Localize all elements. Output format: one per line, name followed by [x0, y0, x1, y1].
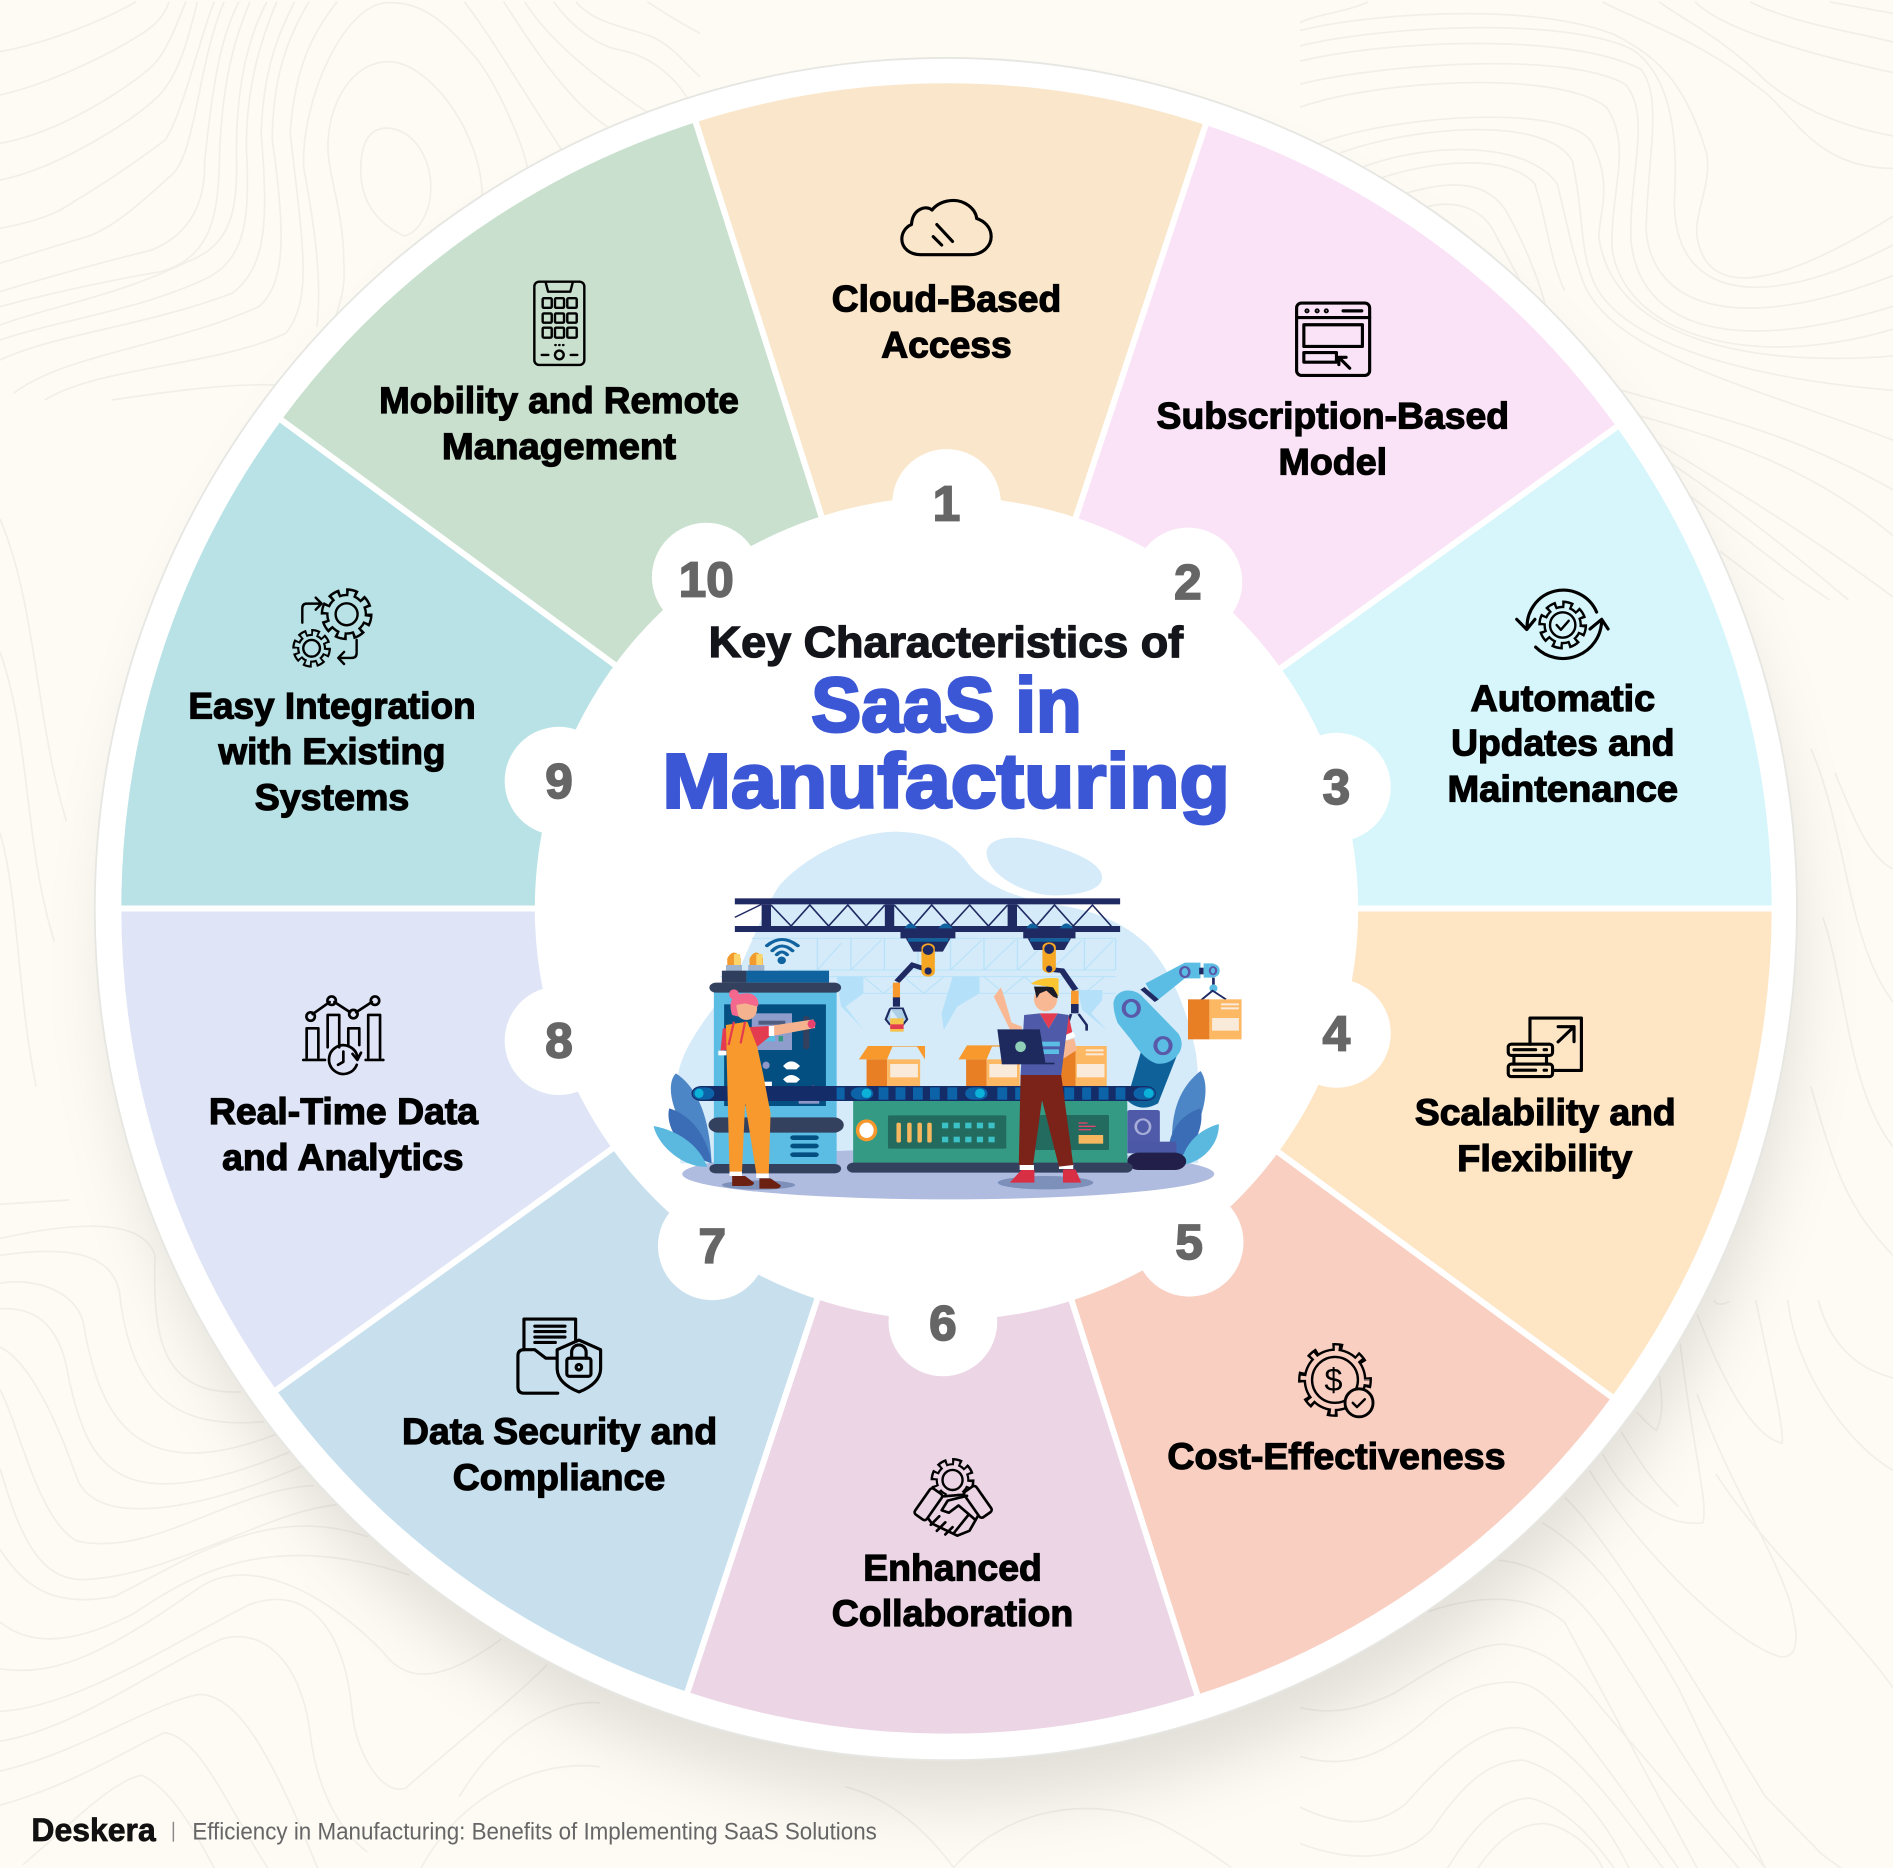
footer brand: Deskera: [31, 1811, 157, 1848]
label: Mobility and Remote Management: [379, 379, 739, 467]
number badge 6: [889, 1268, 997, 1376]
icon: mobile phone: [534, 282, 584, 365]
faded background truss: [721, 938, 1116, 993]
panel: Scalability and Flexibility: [946, 908, 1775, 1399]
label: Easy Integration with Existing Systems: [188, 684, 476, 818]
label: Easy Integration with Existing Systems: Easy Integration: [188, 684, 476, 726]
worker: woman: [718, 989, 816, 1190]
panel: Data Security and Compliance: [274, 908, 946, 1695]
icon: handshake and gear: [913, 1461, 993, 1536]
label: Easy Integration with Existing Systems: Systems: [255, 776, 409, 818]
label: Data Security and Compliance: Compliance: [453, 1456, 665, 1498]
label: Data Security and Compliance: Data Security and: [402, 1410, 717, 1452]
number badge 2: [1134, 528, 1242, 636]
label: Enhanced Collaboration: Collaboration: [832, 1592, 1073, 1634]
label: Real-Time Data and Analytics: [209, 1090, 479, 1178]
label: Scalability and Flexibility: [1415, 1091, 1676, 1179]
center hub: [535, 497, 1358, 1320]
label: Real-Time Data and Analytics: Real-Time Data: [209, 1090, 479, 1132]
label: Automatic Updates and Maintenance: [1448, 677, 1678, 810]
icon: scaling servers: [1508, 1018, 1581, 1077]
number badge 10: [652, 523, 761, 631]
number badge 5: 5: [1175, 1215, 1203, 1270]
panel: Cloud-Based Access: [695, 80, 1207, 908]
icon: two gears with arrows: [295, 591, 370, 665]
number badge 2: 2: [1174, 555, 1202, 610]
number badge 6: 6: [929, 1296, 957, 1351]
boxes on conveyor: [859, 1045, 1107, 1086]
label: Cloud-Based Access: [832, 277, 1061, 365]
number badge 7: 7: [699, 1219, 726, 1274]
number badge 7: [658, 1192, 767, 1300]
number badge 5: [1135, 1188, 1243, 1297]
label: Scalability and Flexibility: Scalability and: [1415, 1091, 1676, 1133]
wifi icon: [767, 940, 798, 963]
robot arm base and arm: [1113, 963, 1242, 1170]
label: Easy Integration with Existing Systems: with Existing: [218, 730, 445, 772]
icon: secured folder: [518, 1319, 601, 1393]
panel: Enhanced Collaboration: [686, 908, 1198, 1737]
label: Automatic Updates and Maintenance: Maintenance: [1448, 768, 1678, 810]
footer caption: Efficiency in Manufacturing: Benefits of Implementing SaaS Solutions: [192, 1818, 877, 1845]
panel: Easy Integration with Existing Systems: [118, 418, 946, 908]
panel: Subscription-Based Model: [946, 122, 1619, 908]
hanging arm 2: [1023, 923, 1087, 1031]
ground: [682, 1149, 1214, 1199]
icon: dollar gear: [1301, 1346, 1373, 1417]
number badge 8: 8: [545, 1014, 573, 1069]
number badge 3: [1282, 733, 1391, 841]
illustration: factory scene: [654, 832, 1242, 1199]
label: Scalability and Flexibility: Flexibility: [1457, 1137, 1632, 1179]
icon: browser window: [1297, 303, 1370, 375]
number badge 1: [892, 449, 1001, 558]
label: Subscription-Based Model: Subscription-Based: [1157, 395, 1509, 437]
title: Manufacturing: [662, 739, 1230, 825]
label: Subscription-Based Model: [1157, 395, 1509, 482]
panel: Mobility and Remote Management: [279, 119, 946, 908]
label: Subscription-Based Model: Model: [1278, 440, 1387, 482]
overhead gantry: [735, 898, 1120, 932]
label: Automatic Updates and Maintenance: Automatic: [1470, 677, 1655, 719]
icon: gear with refresh arrows: [1517, 590, 1608, 659]
number badge 1: 1: [933, 476, 960, 531]
title: SaaS in: [811, 663, 1082, 749]
label: Cloud-Based Access: Cloud-Based: [832, 277, 1061, 319]
number badge 8: [505, 986, 613, 1095]
panel: Automatic Updates and Maintenance: [946, 425, 1775, 908]
label: Real-Time Data and Analytics: and Analytics: [222, 1136, 464, 1178]
icon: cloud: [902, 200, 991, 255]
small cloud blob: [987, 838, 1102, 895]
control machine: [709, 953, 844, 1173]
title: [662, 619, 1230, 825]
icon: analytics chart with clock: [303, 996, 383, 1074]
panel: Real-Time Data and Analytics: [118, 908, 946, 1392]
green machine: [847, 1101, 1133, 1173]
conveyor belt: [692, 1086, 1156, 1101]
panel: Cost-Effectiveness: [946, 908, 1614, 1698]
label: Enhanced Collaboration: Enhanced: [863, 1546, 1042, 1588]
label: Mobility and Remote Management: Management: [442, 425, 676, 467]
icon: dollar gear: $: [1324, 1361, 1342, 1398]
number badge 4: [1282, 979, 1391, 1088]
number badge 10: 10: [679, 552, 734, 607]
number badge 3: 3: [1323, 760, 1350, 815]
label: Enhanced Collaboration: [832, 1546, 1073, 1634]
label: Cloud-Based Access: Access: [881, 323, 1012, 365]
background blob: [678, 832, 1199, 1163]
number badge 9: [505, 727, 613, 835]
plant left: [654, 1073, 712, 1167]
number badge 4: 4: [1323, 1006, 1351, 1061]
title: Key Characteristics of: [709, 619, 1184, 667]
worker: man: [994, 978, 1093, 1189]
label: Automatic Updates and Maintenance: Updates and: [1451, 722, 1674, 764]
plant right: [1168, 1071, 1219, 1165]
label: Mobility and Remote Management: Mobility and Remote: [379, 379, 739, 421]
hanging arm 1: [886, 923, 955, 1032]
number badge 9: 9: [545, 754, 573, 809]
label: Cost-Effectiveness: Cost-Effectiveness: [1167, 1435, 1505, 1477]
label: Data Security and Compliance: [402, 1410, 717, 1498]
